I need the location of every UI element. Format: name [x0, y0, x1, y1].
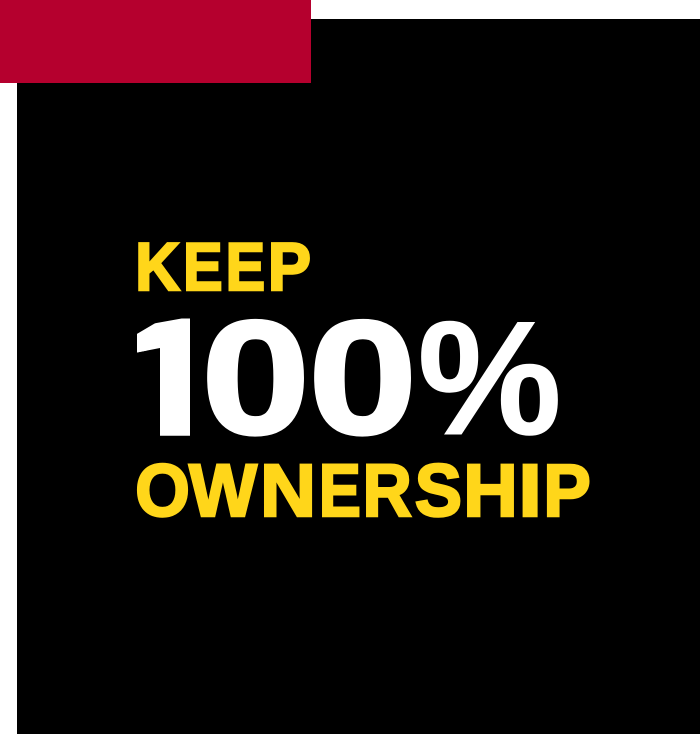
- panel: red corner block: [0, 0, 311, 83]
- headline text: [136, 242, 590, 518]
- heading: OWNERSHIP: N: [260, 450, 316, 533]
- heading: OWNERSHIP: [135, 449, 591, 533]
- heading: OWNERSHIP: I: [518, 449, 542, 532]
- heading: OWNERSHIP: O: [135, 450, 190, 532]
- heading: OWNERSHIP: E: [319, 449, 361, 532]
- heading: OWNERSHIP: H: [463, 449, 518, 532]
- heading: KEEP: E: [226, 228, 265, 305]
- heading: 100%: %: [418, 288, 562, 469]
- heading: OWNERSHIP: S: [415, 450, 462, 532]
- heading: OWNERSHIP: P: [543, 450, 591, 532]
- heading: KEEP: [135, 228, 311, 305]
- heading: 100%: 1: [122, 288, 221, 469]
- heading: KEEP: E: [183, 228, 223, 305]
- heading: OWNERSHIP: R: [363, 450, 412, 533]
- heading: 100%: 0: [308, 288, 417, 469]
- heading: KEEP: K: [135, 228, 180, 304]
- heading: OWNERSHIP: W: [189, 450, 257, 532]
- heading: KEEP: P: [268, 229, 311, 305]
- heading: 100%: [137, 318, 558, 437]
- heading: 100%: 0: [201, 288, 310, 469]
